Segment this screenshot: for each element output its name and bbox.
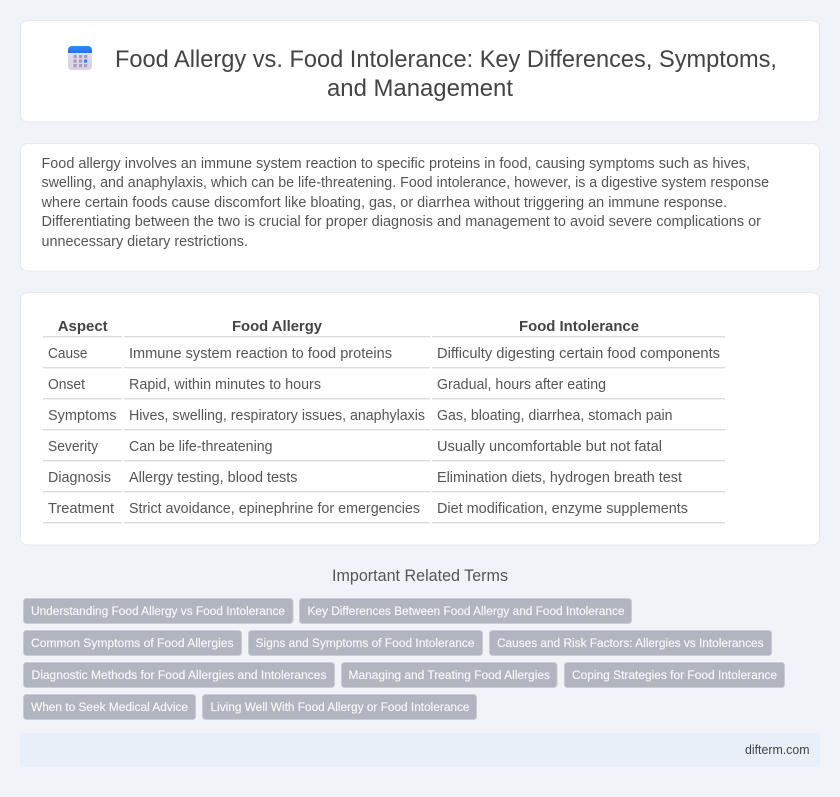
tag (24, 694, 196, 720)
tag: Living Well With Food Allergy or Food Intolerance (210, 700, 470, 714)
title (115, 46, 777, 102)
table row: onset (48, 377, 606, 393)
footer (20, 733, 820, 767)
tag: Coping Strategies for Food Intolerance (572, 668, 777, 682)
tag (24, 630, 242, 656)
tag: Managing and Treating Food Allergies (348, 668, 550, 682)
tag (342, 662, 557, 688)
table row: symptoms: Gas, bloating, diarrhea, stomach pain (437, 408, 672, 424)
table row: diagnosis: Allergy testing, blood tests (129, 470, 298, 486)
table row: diagnosis: Diagnosis (48, 470, 111, 486)
table row: cause (48, 346, 720, 362)
table row: severity (48, 439, 662, 455)
tag (24, 598, 293, 624)
text block: summary paragraph: Food allergy involves an immune system reaction to specific proteins in food, causing symptoms such as hives, (42, 156, 750, 172)
text block: summary paragraph: swelling, and anaphylaxis, which can be life-threatening. Food intolerance, however, is a digestive system response (42, 175, 769, 191)
tag: Signs and Symptoms of Food Intolerance (256, 636, 475, 650)
table row: severity: Can be life-threatening (129, 439, 272, 455)
panel: summary (20, 144, 820, 271)
table row: treatment (48, 501, 688, 517)
footer: difterm.com (745, 742, 810, 757)
table row: severity: Severity (48, 439, 99, 455)
title: Food Allergy vs. Food Intolerance: Key Differences, Symptoms, (115, 46, 777, 73)
tag (202, 694, 476, 720)
tag: Diagnostic Methods for Food Allergies and Intolerances (32, 668, 326, 682)
table row: symptoms: Symptoms (48, 408, 116, 424)
table row: onset: Rapid, within minutes to hours (129, 377, 321, 393)
table row: cause: Cause (48, 346, 88, 362)
panel: comparison table (20, 292, 820, 545)
panel: header (20, 20, 820, 122)
tag (490, 630, 772, 656)
table row: treatment: Treatment (48, 501, 114, 517)
title: and Management (327, 75, 513, 102)
tag (248, 630, 482, 656)
table row: diagnosis (48, 470, 682, 486)
tag (300, 598, 632, 624)
tag: Common Symptoms of Food Allergies (31, 636, 234, 650)
tag (564, 662, 784, 688)
text block: summary paragraph: unnecessary dietary restrictions. (42, 234, 248, 250)
table row: cause: Difficulty digesting certain food components (437, 346, 720, 362)
related terms tag list (24, 598, 784, 720)
table row: severity: Usually uncomfortable but not fatal (437, 439, 662, 455)
text block: summary paragraph (41, 156, 769, 250)
tag: Understanding Food Allergy vs Food Intolerance (31, 604, 285, 618)
table header row (58, 318, 639, 335)
table row: cause: Immune system reaction to food proteins (129, 346, 392, 362)
tag: When to Seek Medical Advice (31, 700, 188, 714)
tag (24, 662, 334, 688)
table row: treatment: Diet modification, enzyme supplements (437, 501, 688, 517)
table row: onset: Gradual, hours after eating (437, 377, 606, 393)
table row: treatment: Strict avoidance, epinephrine for emergencies (129, 501, 420, 517)
table header row: Food Intolerance (519, 318, 639, 335)
tag: Key Differences Between Food Allergy and Food Intolerance (308, 604, 625, 618)
text block: summary paragraph: Differentiating between the two is crucial for proper diagnosis and management to avoid severe complications or (42, 214, 761, 230)
table row: diagnosis: Elimination diets, hydrogen breath test (437, 470, 682, 486)
text block: summary paragraph: where certain foods cause discomfort like bloating, gas, or diarrhea without triggering an immune response. (41, 195, 727, 211)
tag: Causes and Risk Factors: Allergies vs Intolerances (497, 636, 764, 650)
heading: related terms: Important Related Terms (332, 567, 508, 585)
icon: calendar (68, 46, 92, 70)
table header row: Aspect (58, 318, 108, 335)
table row: onset: Onset (48, 377, 85, 393)
table row: symptoms (48, 408, 672, 424)
table row: symptoms: Hives, swelling, respiratory issues, anaphylaxis (129, 408, 425, 424)
table header row: Food Allergy (232, 318, 323, 335)
